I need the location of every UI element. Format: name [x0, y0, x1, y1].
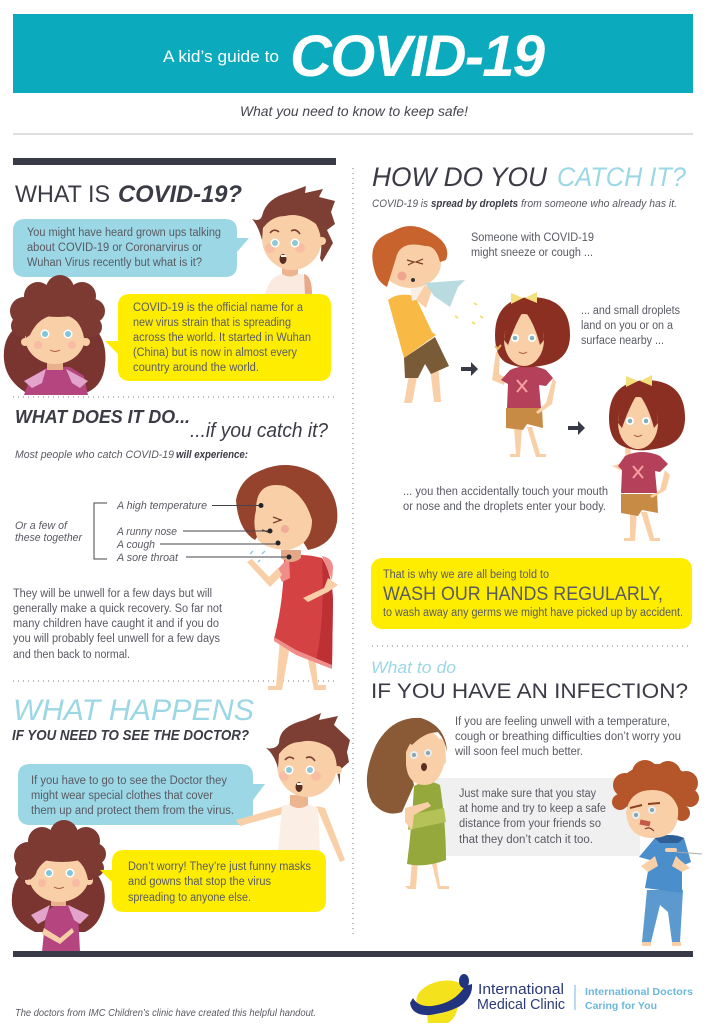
- note: or a few of these together: [15, 520, 83, 544]
- heading: what happens: [12, 694, 254, 744]
- speech bubble: yellow reassurance: [100, 850, 326, 912]
- heading: how do you catch it: CATCH IT?: [557, 162, 686, 192]
- character: sick boy in blue pyjamas: [612, 760, 702, 946]
- character: boy with tank top: [252, 186, 335, 294]
- text: sneeze or cough: Someone with COVID-19: [471, 232, 594, 244]
- symptom list with callout lines: A cough: [116, 539, 155, 551]
- paragraph: recovery: many children have caught it and if you do: [13, 618, 219, 630]
- panel: stay at home: [430, 778, 640, 856]
- text: feeling unwell: will soon feel much better.: [454, 746, 583, 758]
- text: droplets land: land on you or on a: [581, 320, 674, 332]
- speech bubble: blue doctor: If you have to go to see the Doctor they: [31, 775, 227, 787]
- speech bubble: yellow answer: country around the world.: [133, 362, 259, 374]
- speech bubble: blue question: [13, 219, 249, 277]
- speech bubble: yellow answer: new virus strain that is spreading: [133, 317, 291, 329]
- symptom list with callout lines: [94, 500, 292, 564]
- text: droplets land: surface nearby ...: [581, 335, 664, 347]
- heading: what to do: IF YOU HAVE AN INFECTION?: [371, 680, 688, 703]
- panel: stay at home: Just make sure that you stay: [459, 788, 596, 800]
- logo: International Medical Clinic: International: [478, 982, 564, 998]
- character: girl with bow, droplets on hand: [492, 292, 570, 457]
- speech bubble: yellow reassurance: Don’t worry! They’re just funny masks: [128, 861, 311, 873]
- arrow 2: [568, 421, 585, 435]
- speech bubble: blue question: about COVID-19 or Coronarvirus or: [27, 242, 202, 254]
- panel: stay at home: distance from your friends so: [459, 818, 601, 830]
- heading: what does it do: WHAT DOES IT DO...: [15, 407, 190, 427]
- logo: International Medical Clinic: Medical Clinic: [477, 997, 565, 1013]
- intro: spread by droplets: from someone who already has it.: [521, 198, 677, 210]
- intro: most people: Most people who catch COVID-19: [15, 449, 174, 461]
- heading: what is covid-19: WHAT IS: [15, 181, 110, 208]
- text: feeling unwell: cough or breathing difficulties don’t worry you: [455, 731, 681, 743]
- panel: stay at home: at home and try to keep a safe: [459, 803, 606, 815]
- heading: what to do: [371, 658, 688, 703]
- speech bubble: blue doctor: might wear special clothes that cover: [31, 790, 213, 802]
- character: sick girl in green dress: [367, 718, 449, 889]
- text: touch your mouth: or nose and the droplets enter your body.: [403, 501, 606, 513]
- heading: how do you catch it: HOW DO YOU: [372, 162, 548, 192]
- intro: spread by droplets: [372, 198, 677, 210]
- text: sneeze or cough: [471, 232, 594, 259]
- paragraph: recovery: generally make a quick recovery. So far not: [13, 603, 223, 615]
- text: touch your mouth: [403, 486, 608, 513]
- speech bubble: yellow answer: across the world. It started in Wuhan: [133, 332, 311, 344]
- text: sneeze or cough: might sneeze or cough ...: [471, 247, 593, 259]
- heading: what is covid-19: [15, 181, 242, 208]
- note: or a few of these together: Or a few of: [15, 520, 68, 532]
- speech bubble: yellow answer: COVID-19 is the official name for a: [133, 302, 304, 314]
- callout: wash your hands: [371, 558, 692, 629]
- logo: International Medical Clinic: Caring for You: [585, 1000, 657, 1012]
- character: boy pointing: [236, 713, 350, 862]
- speech bubble: blue doctor: [18, 764, 265, 825]
- footer note: The doctors from IMC Children’s clinic have created this helpful handout.: [15, 1007, 316, 1019]
- speech bubble: yellow reassurance: spreading to anyone else.: [128, 892, 251, 904]
- speech bubble: blue question: You might have heard grown ups talking: [27, 227, 221, 239]
- heading: what happens: WHAT HAPPENS: [13, 694, 254, 727]
- heading: what does it do: [15, 407, 329, 442]
- heading: how do you catch it: [372, 162, 686, 192]
- speech bubble: blue question: Wuhan Virus recently but what is it?: [27, 257, 202, 269]
- note: or a few of these together: these together: [15, 532, 83, 544]
- character: curly hair girl in pink dress: [12, 820, 106, 952]
- text: feeling unwell: [454, 716, 681, 758]
- header banner: A kid’s guide to: [163, 47, 279, 66]
- character: woman in red dress coughing: [236, 465, 338, 690]
- callout: wash your hands: WASH OUR HANDS REGULARLY,: [383, 583, 663, 605]
- text: droplets land: [581, 305, 680, 347]
- logo: International Medical Clinic: International Doctors: [585, 986, 693, 998]
- paragraph: recovery: you will probably feel unwell for a few days: [13, 633, 220, 645]
- heading: what is covid-19: COVID-19?: [118, 181, 242, 208]
- symptom list with callout lines: A runny nose: [116, 526, 177, 538]
- character: girl touching mouth: [609, 375, 685, 541]
- character: curly hair girl: [4, 275, 105, 395]
- heading: what does it do: ...if you catch it?: [190, 420, 329, 442]
- heading: what happens: IF YOU NEED TO SEE THE DOCTOR?: [12, 727, 249, 744]
- text: feeling unwell: If you are feeling unwell with a temperature,: [455, 716, 670, 728]
- header banner: COVID-19: [290, 24, 545, 89]
- symptom list with callout lines: A high temperature: [116, 500, 207, 512]
- speech bubble: blue doctor: them up and protect them from the virus.: [31, 805, 234, 817]
- character: sneezing boy with tissue: [372, 226, 483, 403]
- intro: spread by droplets: COVID-19 is: [372, 198, 428, 210]
- speech bubble: yellow answer: [105, 294, 331, 381]
- speech bubble: yellow reassurance: and gowns that stop the virus: [128, 876, 271, 888]
- header banner: [13, 14, 693, 93]
- paragraph: recovery: and then back to normal.: [13, 649, 130, 661]
- panel: stay at home: that they don’t catch it too.: [459, 834, 593, 846]
- callout: wash your hands: That is why we are all being told to: [383, 569, 549, 581]
- logo: International Medical Clinic: [410, 974, 693, 1023]
- intro: spread by droplets: spread by droplets: [431, 198, 518, 210]
- symptom list with callout lines: A sore throat: [116, 552, 179, 564]
- heading: what to do: What to do: [371, 658, 456, 677]
- text: droplets land: ... and small droplets: [581, 305, 680, 317]
- intro: most people: will experience:: [176, 449, 248, 461]
- text: touch your mouth: ... you then accidentally touch your mouth: [403, 486, 608, 498]
- arrow 1: [461, 362, 478, 376]
- paragraph: recovery: [13, 588, 223, 661]
- paragraph: recovery: They will be unwell for a few days but will: [13, 588, 212, 600]
- subtitle: What you need to know to keep safe!: [240, 103, 468, 119]
- callout: wash your hands: to wash away any germs we might have picked up by accident.: [383, 607, 683, 619]
- speech bubble: yellow answer: (China) but is now in almost every: [133, 347, 297, 359]
